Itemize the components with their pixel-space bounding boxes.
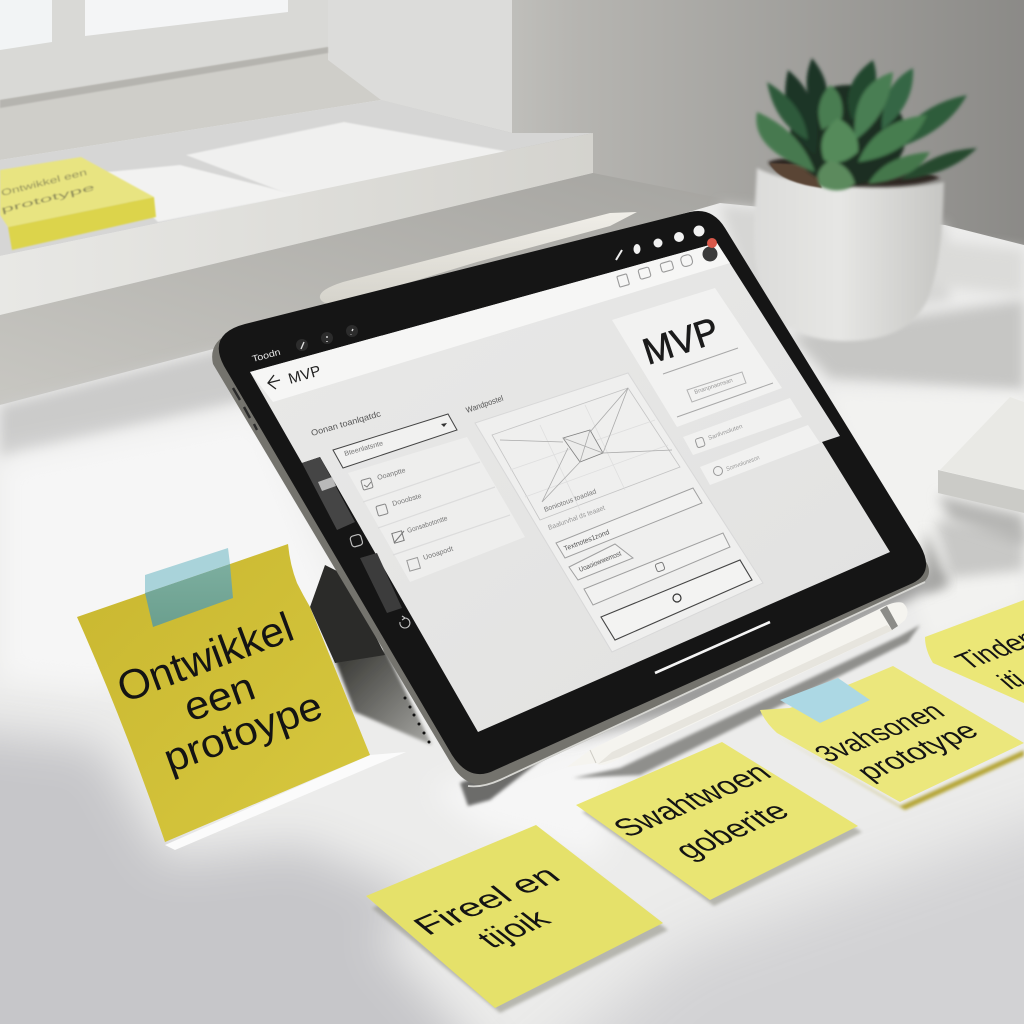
diagram caption: Baalurvhal ds teaaet (547, 505, 606, 532)
checklist row 1 (361, 467, 407, 490)
bottom pencil (567, 602, 920, 778)
checklist panel (348, 437, 525, 582)
form box a (556, 488, 702, 558)
side panel row 1 (683, 398, 802, 455)
top stylus (320, 212, 637, 304)
blue tape (145, 548, 233, 627)
tablet (212, 211, 929, 786)
sticky note: right edge (925, 600, 1024, 703)
note text: protoype (158, 684, 328, 781)
window frame (0, 0, 381, 160)
note paper (77, 544, 370, 842)
side panel row 2: Somvoluneson (726, 455, 761, 473)
sketch diagram (492, 388, 680, 520)
form box b (569, 544, 633, 580)
speaker dots (404, 696, 430, 744)
back arrow (268, 375, 280, 389)
wireframe card (475, 373, 763, 652)
wireframe heading: Wandpostel (465, 394, 505, 415)
diagram caption: Boniotous toaolad (543, 488, 597, 514)
side panel row 2 (700, 425, 820, 485)
big sticky note (77, 544, 406, 850)
avatar (702, 238, 718, 262)
checklist row 1: Ooanptte (377, 467, 407, 482)
form heading: Oonan toanlqatdc (310, 408, 383, 438)
note text: een (178, 664, 261, 730)
tablet shadow on desk (335, 530, 950, 806)
silver bottom edge (468, 582, 925, 786)
sticky note: Fireel en tijoik: tijoik (469, 904, 559, 954)
header title: MVP (286, 362, 323, 388)
form box c (584, 533, 730, 605)
sticky note: Swahtwoen goberite: goberite (666, 796, 797, 865)
small sticky note on sill: prototype (0, 182, 96, 215)
header icons (617, 254, 693, 287)
diagram caption (543, 488, 606, 532)
sticky note: Swahtwoen goberite (576, 742, 862, 906)
blue tape (780, 678, 870, 723)
MVP card button: Bnanpnaonsan (694, 378, 734, 396)
sticky note: Swahtwoen goberite: Swahtwoen (605, 758, 779, 843)
checklist row 2 (376, 493, 422, 516)
sticky note: 3vahsonen prototype (760, 666, 1024, 810)
tablet rim (212, 212, 929, 785)
note text: Ontwikkel (111, 603, 299, 711)
pot (754, 168, 944, 341)
form box a: Textnotes1zond (563, 529, 611, 553)
dropdown (333, 414, 457, 468)
header band (250, 243, 730, 402)
book (938, 397, 1024, 545)
sticky note: Fireel en tijoik: Fireel en (405, 860, 568, 941)
succulent leaves (756, 58, 977, 191)
tablet stand (310, 565, 385, 663)
small sticky note on sill (0, 157, 156, 250)
MVP card (612, 288, 782, 427)
MVP title: MVP (638, 310, 724, 373)
checklist row 3 (392, 515, 449, 543)
window sill (0, 100, 730, 405)
form box d (601, 560, 752, 640)
side panel row 1: Sanfvnoluten (708, 424, 744, 442)
top bar label: Toodn (251, 347, 282, 364)
small sticky note on sill: Ontwikkel een (0, 167, 88, 198)
checklist row 4 (407, 546, 454, 571)
tablet bezel (219, 211, 926, 774)
top bar left icons (296, 325, 358, 351)
wall (381, 0, 1024, 260)
sticky note: Fireel en tijoik (366, 825, 668, 1013)
dropdown: Bteenlatsnte (344, 440, 384, 458)
checklist row 2: Dooobste (392, 493, 422, 508)
top bar right icons (616, 226, 704, 260)
sticky note: 3vahsonen prototype: 3vahsonen (808, 698, 952, 768)
side buttons (233, 388, 257, 430)
sticky note: 3vahsonen prototype: prototype (849, 717, 986, 786)
checklist row 4: Uooapodt (422, 546, 454, 562)
screen (250, 243, 890, 732)
form box b: Uoaoiowwemost (578, 550, 623, 574)
checklist row 3: Gonsabotontte (406, 515, 449, 535)
plant in white pot (754, 58, 977, 341)
soil (768, 157, 940, 187)
home indicator (655, 622, 770, 673)
side toolbar strips (302, 457, 410, 628)
note text (111, 603, 328, 781)
MVP card button (687, 372, 746, 402)
